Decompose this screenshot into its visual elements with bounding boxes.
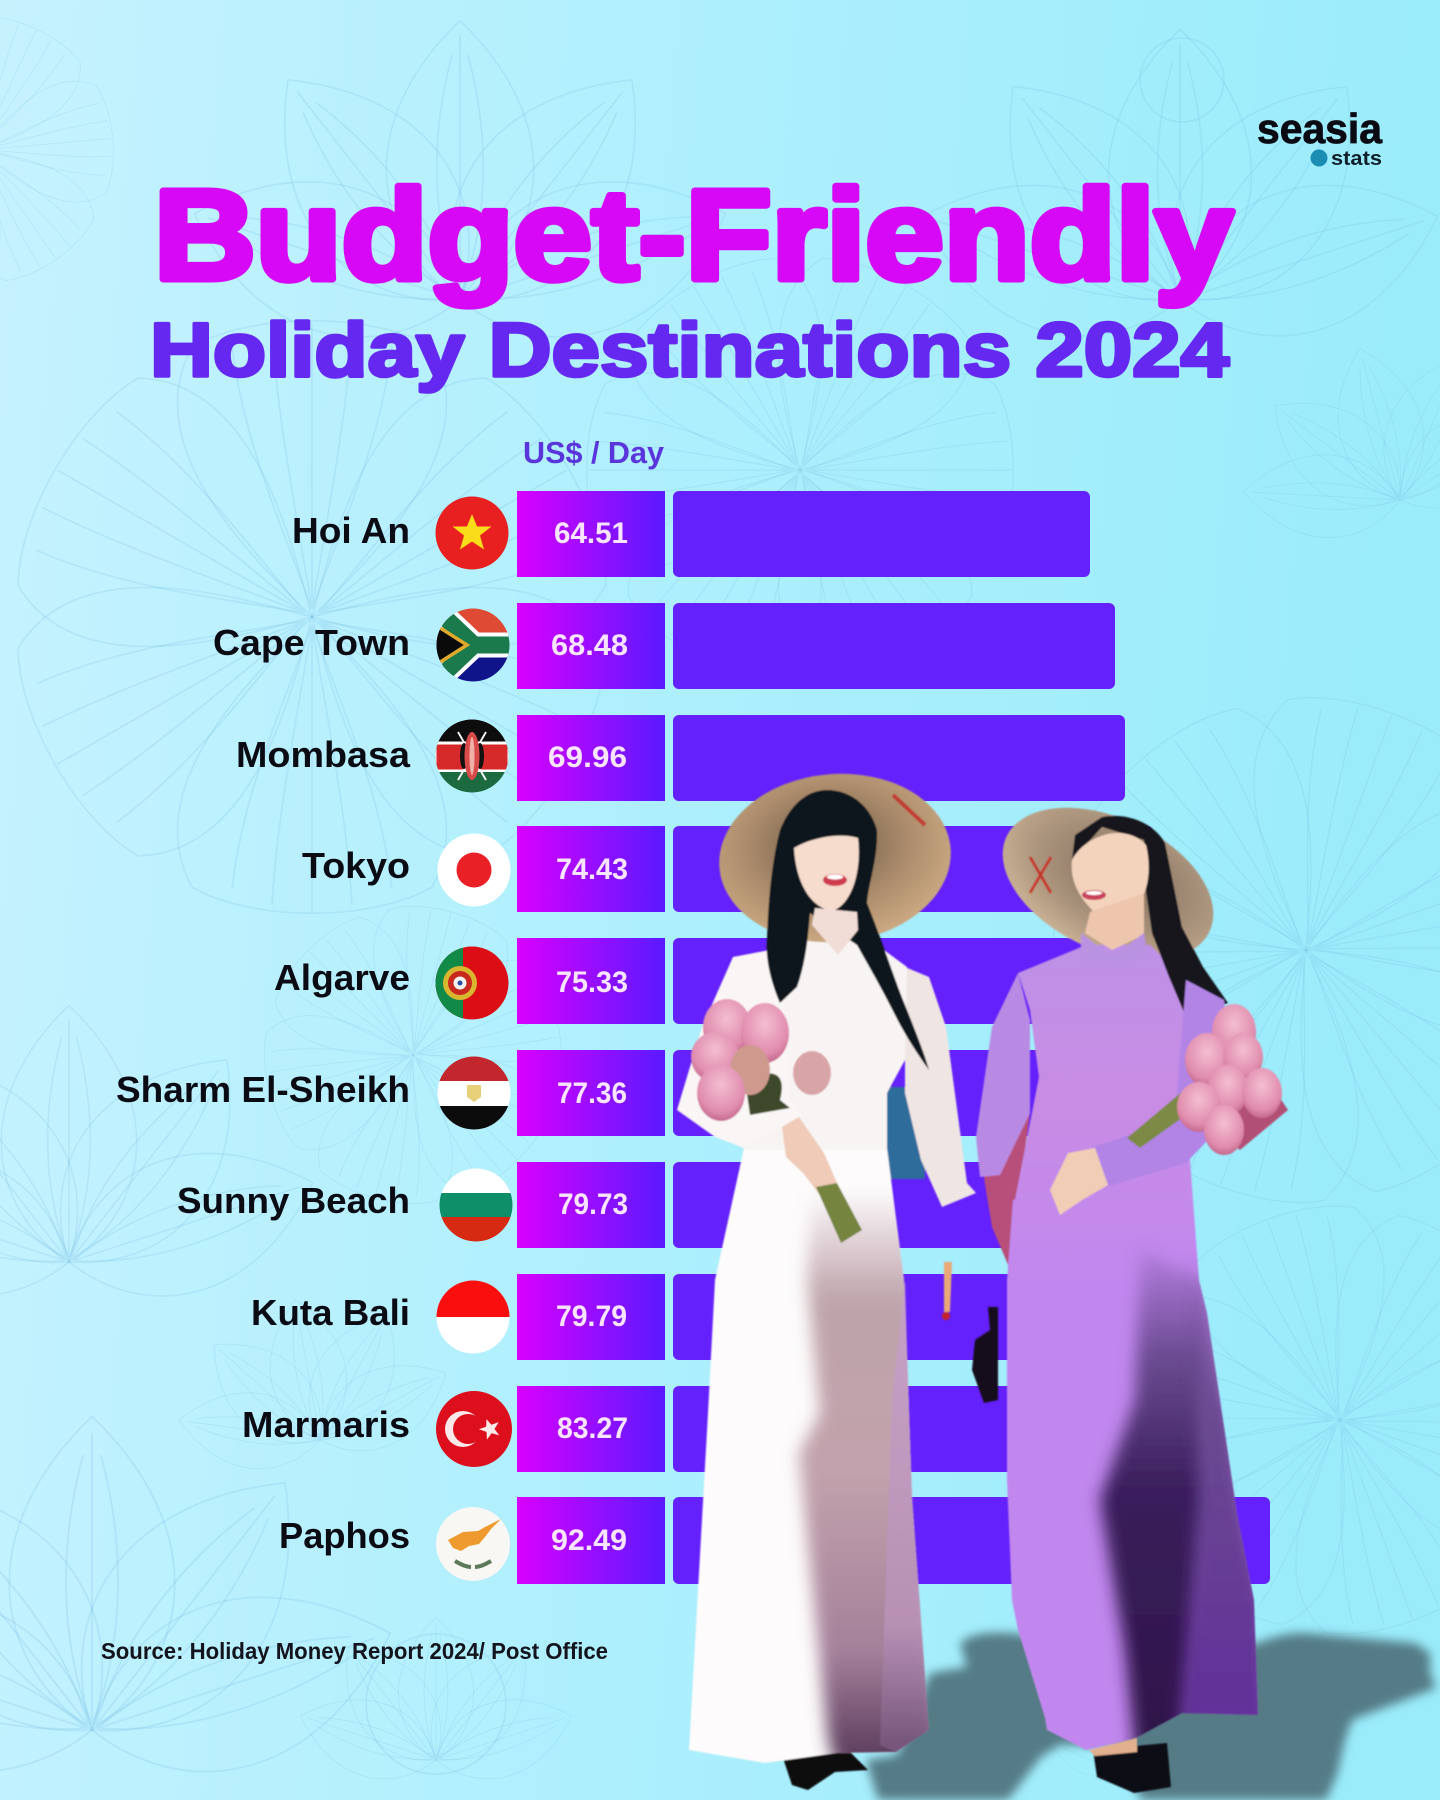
row: Kuta Bali: Kuta Bali <box>251 1292 410 1333</box>
collar <box>1081 933 1148 962</box>
row: Hoi An <box>292 491 1090 577</box>
lotus bouquet <box>1127 1004 1288 1155</box>
shoes <box>782 1752 868 1790</box>
hand <box>1050 1148 1108 1215</box>
row: Mombasa <box>236 715 1125 801</box>
row: Tokyo <box>302 826 1153 912</box>
row: Tokyo: 74.43 <box>556 853 628 886</box>
skirt dark fold <box>1100 1250 1215 1760</box>
mouth <box>1082 890 1106 900</box>
row: Mombasa: Mombasa <box>236 734 411 775</box>
hair <box>1072 816 1228 1017</box>
strap <box>972 1307 998 1403</box>
row: Marmaris: 83.27 <box>557 1412 628 1445</box>
bodice <box>1007 945 1197 1285</box>
right sleeve <box>1093 980 1230 1187</box>
left sleeve <box>677 950 800 1148</box>
face <box>794 836 859 911</box>
skirt <box>1007 1160 1258 1750</box>
woman in white <box>677 764 976 1790</box>
ground shadow <box>866 1633 1436 1800</box>
row: Paphos: Paphos <box>279 1515 410 1556</box>
row: Algarve: 75.33 <box>556 966 628 999</box>
row: Sunny Beach: 79.73 <box>558 1188 628 1221</box>
row: Cape Town: Cape Town <box>213 622 410 663</box>
skirt shaded folds <box>799 1190 935 1770</box>
photo cut-out: two women in ao dai <box>677 764 1288 1793</box>
column heading: US$ / Day: US$ / Day <box>523 435 665 470</box>
row: Sunny Beach <box>178 1162 1002 1248</box>
neck and collar <box>812 908 858 955</box>
lotus in sleeve <box>980 1113 1030 1267</box>
neck <box>1085 893 1144 950</box>
row: Sharm El-Sheikh: Sharm El-Sheikh <box>116 1069 410 1110</box>
row: Marmaris: Marmaris <box>242 1404 410 1445</box>
subtitle: Holiday Destinations 2024 <box>150 308 1229 393</box>
hair <box>767 790 929 1070</box>
shoes <box>1093 1743 1171 1793</box>
skirt right band <box>1170 1288 1259 1718</box>
lotus bouquet <box>691 999 831 1121</box>
left sleeve <box>976 973 1030 1177</box>
face <box>1072 833 1149 917</box>
row: Cape Town: 68.48 <box>551 629 628 662</box>
row: Tokyo: Tokyo <box>302 845 410 886</box>
skirt <box>689 1148 929 1763</box>
mouth <box>823 874 847 886</box>
woman in purple <box>942 777 1288 1793</box>
row: Mombasa: 69.96 <box>548 741 627 774</box>
hand and stems <box>782 1117 837 1207</box>
bodice <box>700 930 907 1150</box>
bar chart <box>116 491 1270 1584</box>
row: Sharm El-Sheikh: 77.36 <box>557 1077 627 1110</box>
source note: Source: Holiday Money Report 2024/ Post Office <box>101 1638 608 1664</box>
row: Paphos: 92.49 <box>551 1524 627 1557</box>
logo: seasia stats: stats <box>1331 148 1382 170</box>
title: Budget-Friendly <box>154 164 1233 307</box>
bag behind <box>883 1087 925 1179</box>
hat <box>979 777 1237 991</box>
row: Algarve <box>274 938 1159 1024</box>
row: Algarve: Algarve <box>274 957 410 998</box>
row: Cape Town <box>213 603 1115 689</box>
hat <box>712 764 958 952</box>
row: Sunny Beach: Sunny Beach <box>177 1180 410 1221</box>
row: Hoi An: Hoi An <box>292 510 410 551</box>
row: Paphos <box>279 1497 1270 1584</box>
logo: seasia stats: seasia <box>1257 105 1383 152</box>
row: Sharm El-Sheikh <box>117 1050 1040 1136</box>
row: Kuta Bali <box>253 1274 1008 1360</box>
row: Hoi An: 64.51 <box>554 517 628 550</box>
right sleeve <box>905 967 976 1207</box>
row: Kuta Bali: 79.79 <box>556 1300 627 1333</box>
skirt slit panel <box>880 1280 929 1752</box>
row: Marmaris <box>242 1386 1210 1472</box>
